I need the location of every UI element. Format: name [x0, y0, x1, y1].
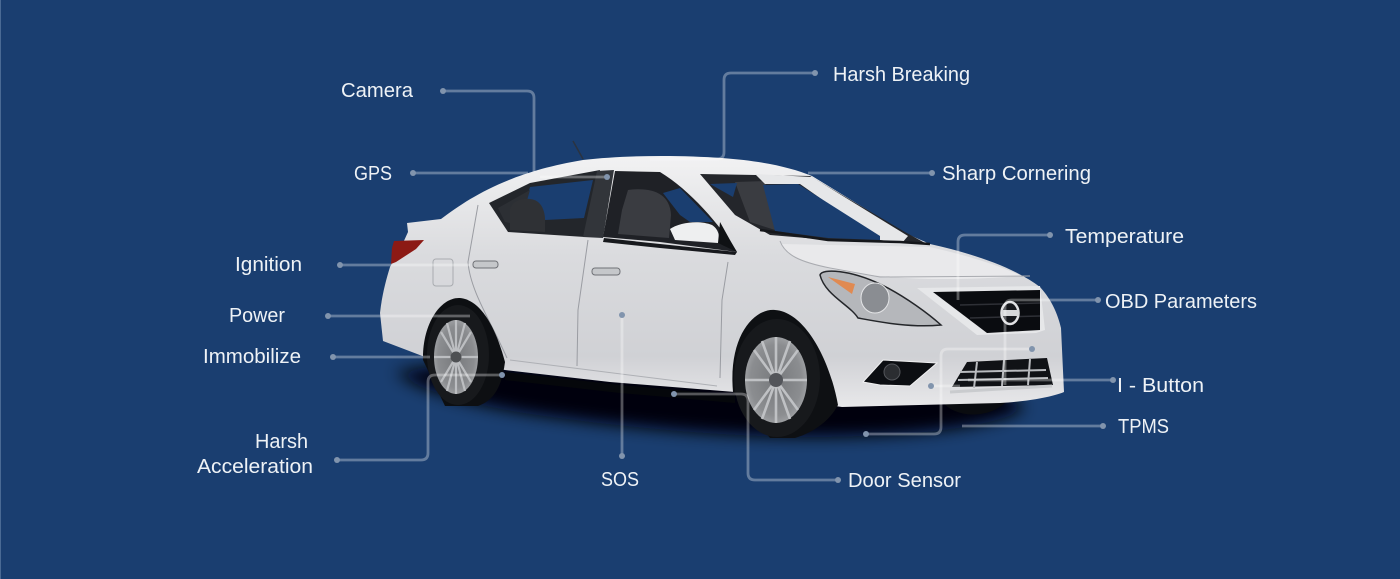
rear wheel arch [423, 298, 505, 406]
rear tyre [427, 305, 489, 405]
label: Immobilize: Immobilize [203, 346, 301, 368]
line: harsh breaking [650, 73, 815, 159]
car body [380, 156, 1064, 407]
wiper line [760, 230, 930, 244]
label: Power: Power [229, 305, 285, 327]
line: OBD parameters [1005, 300, 1098, 385]
door handles [473, 261, 498, 268]
front wheel arch [732, 310, 838, 438]
line: ignition [340, 264, 470, 266]
lower grille [952, 358, 1053, 387]
line: GPS [413, 173, 607, 177]
label: OBD Parameters: OBD Parameters [1105, 291, 1257, 313]
antenna [573, 141, 583, 159]
line: sharp cornering [808, 172, 932, 174]
front tyre [734, 319, 820, 437]
label: Sharp Cornering: Sharp Cornering [942, 163, 1091, 185]
headlight amber [828, 277, 855, 294]
line: immobilize [333, 356, 430, 358]
grille chrome [917, 286, 1045, 335]
line: door sensor [674, 394, 838, 480]
door seams [468, 205, 728, 378]
nissan badge [1002, 302, 1018, 324]
connector lines [328, 73, 1113, 480]
line: bumper [866, 349, 1032, 434]
line: camera [443, 91, 534, 172]
connector dots [325, 70, 1116, 483]
label: GPS: GPS [354, 163, 392, 185]
rear seat [510, 199, 545, 232]
rear rim [434, 320, 478, 394]
line: temperature [958, 235, 1050, 300]
windshield glass [763, 184, 880, 240]
headlight [820, 271, 941, 326]
sill shadow [505, 372, 735, 403]
front seat [618, 189, 671, 238]
label: Ignition: Ignition [235, 254, 302, 276]
line: power [328, 315, 470, 317]
line: I-button [968, 379, 1113, 381]
windshield interior [735, 181, 775, 230]
label: TPMS: TPMS [1118, 416, 1169, 438]
windshield white pillar [755, 174, 908, 243]
rear window glass [520, 180, 593, 220]
fuel door [433, 259, 453, 286]
side mirror [670, 222, 719, 243]
car [380, 141, 1064, 438]
tail light [391, 240, 424, 264]
window sill [603, 238, 737, 255]
line: TPMS [962, 425, 1103, 427]
front door window [603, 171, 737, 252]
label: Harsh Acceleration: Harsh [255, 431, 308, 453]
label: Temperature: Temperature [1065, 226, 1184, 248]
label: Harsh Breaking: Harsh Breaking [833, 64, 970, 86]
label: SOS: SOS [601, 469, 639, 491]
headlight lens [861, 283, 889, 313]
line: fog lamp [931, 385, 960, 387]
line: SOS [621, 315, 623, 456]
left edge [0, 0, 1, 579]
front rim [745, 337, 807, 423]
sill line [510, 360, 717, 386]
rear window frame [489, 170, 600, 237]
badge bar [1002, 310, 1019, 316]
label: Harsh Acceleration [197, 431, 313, 478]
line: harsh acceleration [337, 375, 502, 460]
label: Door Sensor: Door Sensor [848, 470, 961, 492]
windshield frame [700, 174, 925, 243]
hood line [780, 241, 1030, 277]
label: Camera: Camera [341, 80, 414, 102]
hood highlight [782, 244, 1022, 279]
grille [933, 290, 1040, 333]
label: Harsh Acceleration: Acceleration [197, 456, 313, 478]
label: I - Button: I - Button [1117, 375, 1204, 397]
fog light [863, 360, 937, 386]
B pillar [583, 170, 614, 238]
car shadow [395, 360, 1025, 437]
far-side tyre [940, 398, 1010, 415]
